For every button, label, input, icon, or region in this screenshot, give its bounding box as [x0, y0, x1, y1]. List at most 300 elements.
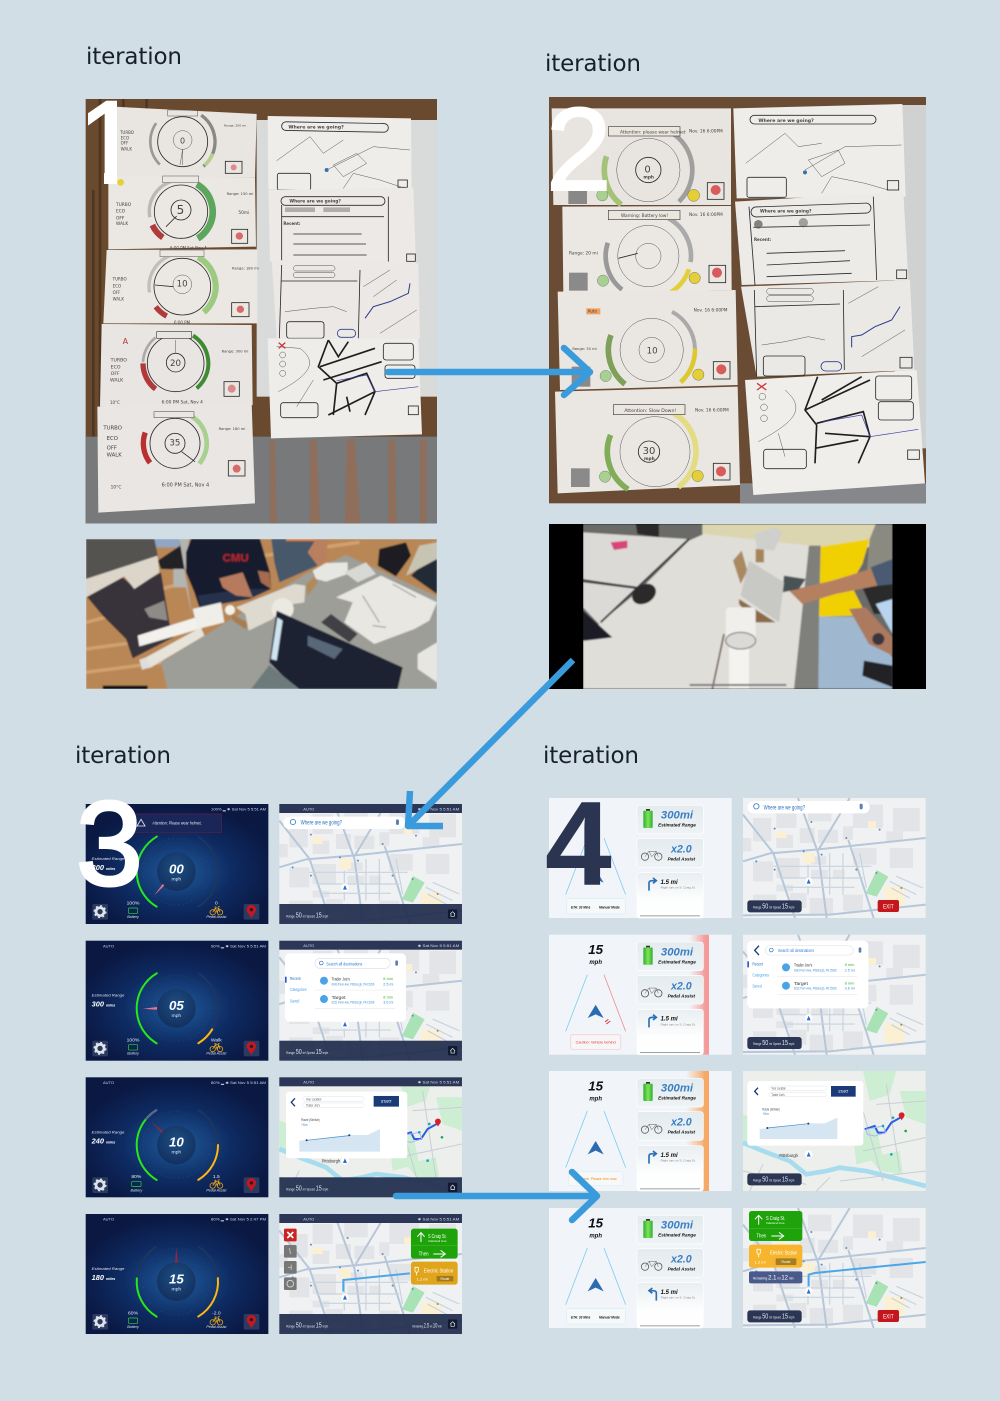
speed: mph	[589, 1096, 602, 1102]
exit button	[878, 1310, 899, 1322]
sheet: speed 20: TURBO	[110, 358, 127, 364]
turn card: 1.5 mi	[661, 1017, 678, 1023]
panel: navigation iter 3	[279, 1214, 462, 1334]
bottom bar: Range 50 mi Speed 15 mph	[286, 1047, 328, 1056]
pedal card: Pedal Assist	[668, 1130, 696, 1135]
sheet: speed 30: mph	[644, 456, 655, 462]
top bar: ✱ Sat Nov 5 5:51 AM	[418, 1217, 459, 1221]
turn card: 1.5 mi	[661, 880, 678, 886]
battery: Battery	[127, 1052, 140, 1056]
gauge: mph	[172, 1013, 181, 1019]
top bar: ✱ Sat Nov 5 5:51 AM	[418, 1081, 459, 1085]
top bar: AUTO	[303, 806, 314, 811]
range card: 300mi	[661, 1220, 694, 1232]
orange side warning	[686, 1071, 709, 1191]
top bar: AUTO	[303, 1080, 314, 1085]
direction card: S Craig St.	[766, 1216, 786, 1222]
route card: Your Location	[771, 1087, 786, 1091]
destination card: Trader Joe's	[794, 963, 813, 969]
bottom bar: Range 50 mi Speed 15 mph	[286, 1320, 328, 1329]
sheet: speed 0: WALK	[121, 147, 132, 152]
destination card: 8 min	[845, 962, 854, 967]
arrow: iteration 2 to 3	[408, 660, 573, 826]
number 1: 1	[76, 77, 142, 209]
battery: 60%	[128, 1311, 139, 1317]
route card: START	[838, 1089, 848, 1094]
photo: cardboard prototype team	[86, 539, 437, 689]
sheet: low battery: Range: 20 mi	[569, 250, 598, 256]
sheet: route preview	[272, 260, 420, 338]
status bar: 80% ▂ ✱ Sat Nov 5 2:47 PM	[211, 1218, 266, 1222]
panel: destination list iter 3	[279, 941, 462, 1061]
route line	[809, 1262, 926, 1286]
location button	[244, 1041, 259, 1056]
mode pill: Manual Mode	[599, 905, 620, 909]
sheet: speed 0: OFF	[121, 141, 129, 146]
range card	[637, 805, 703, 834]
sheet: speed 5	[108, 168, 256, 256]
pedal assist: Pedal Assist	[206, 1188, 227, 1192]
info pill	[747, 900, 802, 912]
direction card: Then	[756, 1234, 766, 1240]
sheet: speed 35: OFF	[107, 445, 117, 451]
mode pill	[566, 1309, 626, 1324]
range: Estimated Range	[92, 993, 125, 998]
battery: 100%	[127, 901, 140, 907]
destination card: 6343 Penn Ave, Pittsburgh, PA 15206	[794, 968, 837, 972]
range	[92, 856, 125, 872]
range: 240 miles	[91, 1136, 115, 1145]
pedal assist: 0	[215, 901, 218, 907]
mode pill: ETA: 33 Mins	[571, 905, 590, 909]
gauge: mph	[172, 876, 181, 882]
location button	[244, 904, 259, 920]
pedal assist: Pedal Assist	[206, 1325, 227, 1329]
sheet: speed 35	[97, 399, 255, 513]
speed cone	[566, 975, 626, 1031]
destination card: 2.5 mi	[383, 982, 393, 986]
number 4: 4	[545, 777, 612, 911]
speed	[588, 1215, 604, 1239]
drive mode: AUTO	[103, 1217, 114, 1222]
pedal card	[637, 975, 703, 1004]
sheet: speed 20: ECO	[111, 364, 121, 370]
range	[92, 993, 125, 1009]
turn card: Right turn on S. Craig St.	[661, 1022, 696, 1026]
sheet: speed 10	[103, 242, 259, 332]
speed cone	[566, 1111, 626, 1168]
exit button	[878, 900, 899, 912]
speed	[588, 942, 604, 966]
bottom bar: Remaining 2.5 mi 10 min	[412, 1322, 442, 1329]
gauge	[122, 816, 233, 927]
speed: 15	[588, 1215, 604, 1230]
sheet: map search	[733, 104, 906, 198]
sheet: speed 30: Attention: Slow Down!	[624, 408, 676, 414]
sheet: speed 0: Nov. 16 6:00PM	[689, 129, 723, 135]
gauge: mph	[172, 1150, 181, 1156]
panel: iter 4 destination list	[743, 935, 926, 1055]
direction card	[749, 1211, 802, 1241]
range card: Estimated Range	[658, 1233, 696, 1238]
destination card: 3.6 mi	[845, 987, 855, 991]
sheet: speed 0: Range: 200 mi	[224, 124, 246, 128]
sheet: speed 35: Range: 180 mi	[219, 427, 245, 431]
pedal assist: 1.5	[213, 1174, 220, 1180]
charging card: Electric Station	[770, 1251, 797, 1257]
range card: Estimated Range	[658, 959, 696, 964]
mode pill: Manual Mode	[599, 1315, 620, 1319]
sheet: speed 35: ECO	[107, 436, 118, 442]
map label: Pittsburgh: Pittsburgh	[779, 1153, 799, 1158]
caution pill	[571, 1035, 621, 1049]
pedal card	[637, 1249, 703, 1277]
destination card: 8 min	[383, 976, 393, 981]
sheet: low battery: Warning: Battery low!	[621, 213, 668, 219]
panel: dashboard speed 15	[86, 1214, 268, 1337]
destination card: Target	[794, 981, 808, 987]
status bar: 90% ▂ ✱ Sat Nov 5 5:51 AM	[211, 944, 266, 948]
sheet: speed 5: ECO	[116, 209, 126, 215]
sheet: speed 5: WALK	[116, 221, 128, 227]
charging card: Route	[441, 1277, 450, 1281]
sheet: speed 20	[100, 317, 253, 409]
sheet: speed 10: ECO	[113, 283, 121, 288]
sheet: speed 5: 6:00 PM Sat Nov 4	[170, 245, 207, 250]
destination card	[747, 941, 868, 1008]
gauge: 10	[169, 1135, 184, 1150]
destination card: 3.6 mi	[383, 1001, 393, 1005]
sheet: map search	[268, 116, 412, 190]
sheet: speed 0	[110, 96, 257, 187]
battery: 80%	[131, 1174, 142, 1180]
panel: dashboard speed 00	[86, 804, 268, 927]
overheat pill	[568, 1172, 623, 1186]
charging card: Electric Station	[424, 1268, 453, 1274]
sheet: speed 5: TURBO	[115, 202, 132, 208]
charging card	[411, 1262, 458, 1285]
route card: Route (Similar)	[301, 1118, 320, 1122]
settings button	[92, 1177, 108, 1193]
turn card	[637, 1146, 703, 1191]
destination card: 8 min	[383, 994, 393, 999]
pedal card: Pedal Assist	[668, 993, 696, 998]
route card	[286, 1092, 407, 1158]
range	[92, 1266, 125, 1282]
sheet: navigation map	[745, 370, 925, 495]
sheet: speed 0: ECO	[121, 135, 129, 140]
info pill: Range 50 mi Speed 15 mph	[753, 1176, 794, 1183]
battery	[131, 1174, 143, 1192]
sheet: speed 10: WALK	[113, 297, 124, 302]
bottom bar	[279, 904, 462, 924]
range card: 300mi	[661, 1083, 694, 1095]
top bar: AUTO	[303, 1216, 314, 1221]
gauge	[120, 1088, 234, 1202]
search bar	[748, 801, 870, 813]
drive mode: AUTO	[103, 1080, 114, 1085]
sheet: speed 30	[555, 387, 740, 513]
turn card: Right turn on S. Craig St.	[661, 886, 696, 890]
pedal assist: Pedal Assist	[206, 915, 227, 919]
destination card: Search all destinations	[778, 948, 814, 954]
route card: +5m	[762, 1112, 769, 1116]
sheet: destination list	[735, 192, 908, 285]
pedal assist	[206, 1037, 227, 1056]
info pill	[747, 1173, 802, 1185]
panel: dashboard speed 05	[86, 941, 268, 1064]
map label: Pittsburgh: Pittsburgh	[322, 1159, 341, 1164]
turn card	[637, 1283, 703, 1328]
battery: Battery	[127, 915, 140, 919]
sheet: speed 10: 10	[647, 346, 658, 356]
sheet: speed 5: 5	[177, 203, 184, 217]
pedal assist	[206, 901, 227, 919]
route card: Trader Joe's	[771, 1093, 785, 1097]
sheet: speed 0: Attention: please wear helmet	[620, 129, 686, 135]
range	[91, 1129, 125, 1145]
sheet: speed 10: Range: 180 mi	[232, 266, 259, 270]
speed: 15	[588, 942, 604, 957]
sheet: speed 5: Range: 150 mi	[227, 192, 253, 196]
speed cone	[566, 1248, 626, 1305]
range card	[637, 1215, 703, 1244]
settings button	[92, 1041, 108, 1056]
pedal card	[637, 839, 703, 867]
sheet: route preview	[741, 280, 914, 377]
panel: iter 4 map search	[743, 798, 926, 918]
pedal assist: Pedal Assist	[206, 1052, 227, 1056]
direction card: Then	[419, 1251, 429, 1257]
destination card: Categories	[752, 973, 769, 978]
gauge: 00	[169, 861, 184, 876]
drive mode: AUTO	[103, 943, 114, 948]
photo: iteration 2 paper prototypes	[549, 97, 926, 513]
direction card: Oakland Ave	[428, 1239, 447, 1243]
sheet: speed 0: mph	[643, 175, 654, 181]
heading: iteration 2: iteration	[545, 51, 641, 77]
range: 300 miles	[92, 863, 115, 872]
top bar	[279, 941, 462, 950]
info pill: Range 50 mi Speed 15 mph	[753, 1040, 794, 1047]
panel: iter 4 cluster idle	[549, 798, 732, 918]
speed: mph	[589, 960, 602, 966]
sheet: map search: Where are we going?	[288, 125, 344, 131]
number 3: 3	[76, 777, 143, 911]
caution pill: Caution: Vehicle behind	[576, 1040, 616, 1044]
pedal card: x2.0	[670, 844, 692, 856]
photo: cardboard prototype team: CMU	[223, 553, 249, 565]
sheet: speed 20: Range: 300 mi	[222, 350, 248, 354]
turn card: Right turn on S. Craig St.	[661, 1296, 696, 1300]
route card	[747, 1081, 863, 1146]
panel: iter 4 cluster overheat	[549, 1071, 732, 1191]
info pill	[747, 1310, 802, 1322]
destination card: Saved	[752, 984, 762, 989]
sheet: speed 5: 50mi	[238, 210, 249, 216]
range: 180 miles	[92, 1273, 115, 1282]
gauge: 15	[169, 1271, 184, 1286]
range: 300 miles	[92, 1000, 115, 1009]
pedal assist	[206, 1174, 227, 1192]
bottom bar	[279, 1177, 462, 1197]
charging card: 1.2 mi	[755, 1260, 766, 1265]
panel: route preview iter 3	[279, 1077, 462, 1197]
route card: Trader Joe's	[306, 1104, 320, 1108]
pedal card	[637, 1112, 703, 1140]
route card: +5m	[301, 1123, 308, 1127]
bottom bar: Range 50 mi Speed 15 mph	[286, 1184, 328, 1193]
sheet: speed 35: 6:00 PM Sat, Nov 4	[162, 483, 209, 489]
panel: iter 4 route preview	[743, 1071, 926, 1191]
sheet: speed 35: 35	[169, 438, 180, 448]
pedal card: Pedal Assist	[668, 1267, 696, 1272]
destination card	[285, 953, 406, 1022]
bottom bar	[279, 1314, 462, 1334]
status bar: 80% ▂ ✱ Sat Nov 5 5:51 AM	[211, 1081, 266, 1085]
settings button	[92, 1314, 108, 1330]
sheet: destination list: Where are we going?	[289, 199, 341, 205]
top bar: ✱ Sat Nov 5 5:51 AM	[418, 807, 459, 811]
top bar	[279, 1077, 462, 1086]
panel: iter 4 cluster navigation	[549, 1208, 732, 1328]
direction card	[411, 1229, 458, 1259]
location button	[244, 1314, 259, 1330]
destination card: Saved	[290, 998, 300, 1003]
search bar: Where are we going?	[764, 805, 805, 811]
info pill: Range 50 mi Speed 15 mph	[753, 1313, 794, 1320]
top bar	[279, 804, 462, 813]
turn card: 1.5 mi	[661, 1290, 678, 1296]
sheet: speed 35: WALK	[107, 453, 122, 459]
battery	[127, 1037, 140, 1056]
bottom bar: Range 50 mi Speed 15 mph	[286, 910, 328, 919]
top bar	[279, 1214, 462, 1223]
panel: iter 4 cluster caution	[549, 935, 732, 1055]
battery: 100%	[127, 1037, 140, 1043]
number 2: 2	[546, 84, 612, 216]
sheet: low battery: Nov. 16 6:00PM	[689, 212, 723, 218]
sheet: speed 10: 6:00 PM	[174, 320, 191, 325]
range card: Estimated Range	[658, 1096, 696, 1101]
direction card: S Craig St.	[428, 1234, 447, 1240]
pedal assist	[206, 1311, 227, 1329]
red side warning	[689, 935, 709, 1055]
info pill	[747, 1037, 802, 1049]
gauge	[122, 953, 233, 1064]
sheet: map search: Where are we going?	[758, 118, 814, 124]
destination card: 6343 Penn Ave, Pittsburgh, PA 15206	[332, 982, 374, 986]
remaining pill	[749, 1271, 802, 1283]
top bar: AUTO	[303, 943, 314, 948]
sheet: speed 20: OFF	[111, 371, 120, 377]
battery	[127, 1311, 140, 1329]
range: Estimated Range	[92, 1129, 125, 1134]
status bar: 100% ▂ ✱ Sat Nov 5 5:51 AM	[211, 808, 266, 812]
range: Estimated Range	[92, 856, 125, 861]
heading: iteration 4: iteration	[543, 743, 639, 769]
search bar: Where are we going?	[301, 821, 342, 827]
battery: Battery	[127, 1325, 140, 1329]
speed: 15	[588, 1078, 604, 1093]
battery	[127, 901, 140, 919]
gauge	[122, 1226, 233, 1337]
turn card	[637, 873, 703, 918]
sheet: speed 20: WALK	[110, 378, 124, 384]
turn card: 1.5 mi	[661, 1153, 678, 1159]
range card: 300mi	[661, 946, 694, 958]
panel: iter 4 navigation map	[743, 1208, 926, 1328]
sheet: speed 10: Auto	[588, 309, 597, 314]
pedal card: x2.0	[670, 1117, 692, 1129]
sheet: speed 35: TURBO	[102, 425, 122, 431]
route card: START	[381, 1099, 392, 1104]
mode pill: ETA: 33 Mins	[571, 1315, 590, 1319]
sheet: speed 0: 0	[180, 136, 185, 145]
destination card: 8 min	[845, 980, 854, 985]
sheet: speed 0: TURBO	[119, 130, 134, 135]
mode pill	[566, 899, 626, 914]
sheet: speed 30: Nov. 16 6:00PM	[695, 408, 729, 414]
sheet: speed 20: 10°C	[110, 400, 120, 405]
sheet: speed 20: 20	[170, 359, 181, 369]
destination card: Search all destinations	[326, 961, 363, 967]
range card: Estimated Range	[658, 823, 696, 828]
panel: map search iter 3	[279, 804, 462, 924]
location button	[244, 1177, 259, 1193]
sheet: destination list	[268, 188, 416, 263]
side buttons	[284, 1229, 297, 1290]
photo: tablet prototype test	[549, 524, 926, 689]
destination card: 2.5 mi	[845, 968, 855, 972]
range card	[637, 942, 703, 971]
panel: dashboard speed 10	[86, 1077, 268, 1202]
sheet: speed 10: OFF	[113, 290, 121, 295]
sheet: low battery	[562, 196, 732, 316]
photo: iteration 1 paper prototypes	[86, 96, 437, 523]
charging card: Route	[782, 1260, 791, 1264]
exit button: EXIT	[883, 903, 894, 910]
destination card: Recent	[290, 976, 301, 981]
sheet: speed 10	[558, 289, 738, 411]
sheet: speed 0	[552, 108, 731, 232]
turn card: Right turn on S. Craig St.	[661, 1159, 696, 1163]
turn card	[637, 1009, 703, 1055]
route card: Your Location	[306, 1097, 321, 1101]
range card: 300mi	[661, 810, 694, 822]
heading: iteration 3: iteration	[75, 743, 171, 769]
speed	[588, 1078, 604, 1102]
remaining pill: Remaining 2.1 mi 12 min	[753, 1274, 794, 1281]
sheet: speed 20: 6:00 PM Sat, Nov 4	[162, 399, 203, 405]
sheet: speed 35: 10°C	[111, 485, 121, 491]
destination card: 6231 Penn Ave, Pittsburgh, PA 15206	[794, 987, 837, 991]
settings button	[92, 904, 108, 920]
destination card: Categories	[290, 987, 307, 992]
overheat pill: Overheat. Please turn now.	[574, 1177, 617, 1181]
sheet: navigation map	[268, 338, 422, 438]
alert banner: Attention: Please wear helmet.	[152, 820, 202, 825]
sheet: speed 10: Range: 30 mi	[572, 347, 597, 351]
route line	[343, 1273, 410, 1292]
pedal assist: -2.0	[212, 1311, 221, 1317]
bottom bar	[279, 1041, 462, 1061]
sheet: speed 10: TURBO	[112, 277, 127, 282]
info pill: Range 50 mi Speed 15 mph	[753, 903, 794, 910]
arrow: iteration 1 to 2	[388, 348, 590, 395]
speed: mph	[589, 1233, 602, 1239]
pedal card: Pedal Assist	[668, 857, 696, 862]
